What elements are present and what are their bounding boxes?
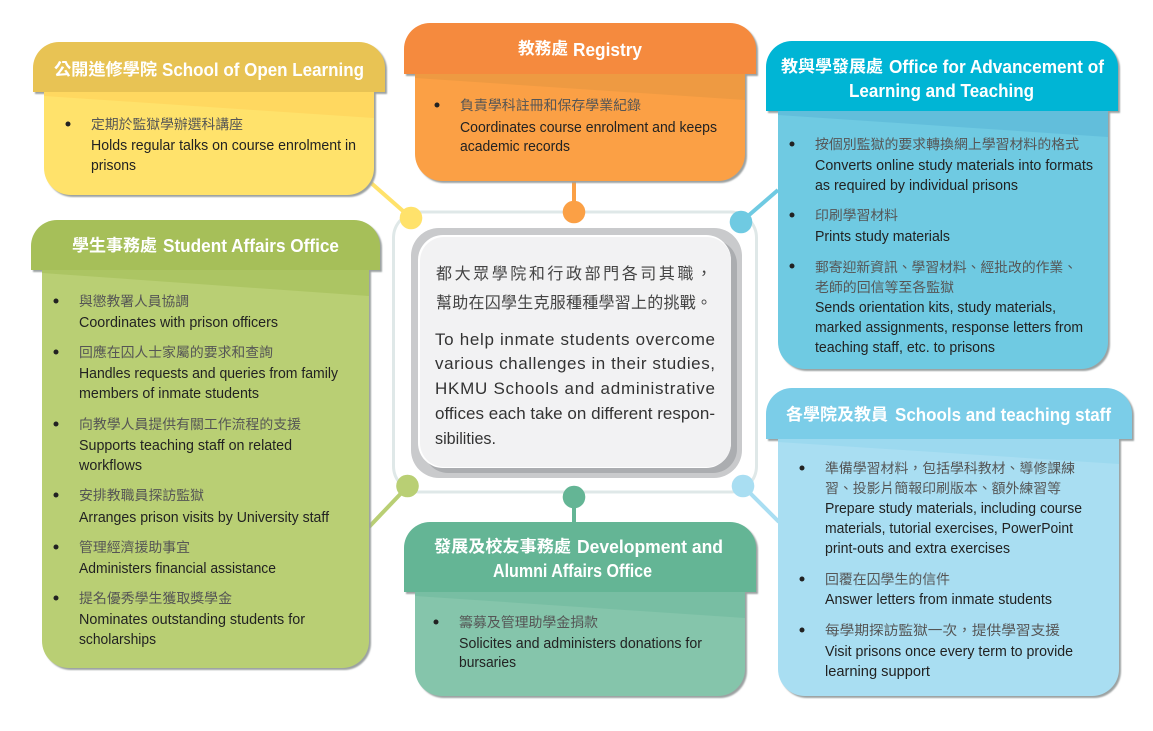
list item: sends kits: 郵寄迎新資訊、學習材料、經批改的作業、 <box>815 259 1077 275</box>
list item: sends kits: marked assignments, response letters from <box>815 320 1083 336</box>
heading: 發展及校友事務處 <box>434 536 572 556</box>
list item: coordinates: 與懲教署人員協調 <box>79 294 189 309</box>
heading: Office for Advancement of <box>889 57 1105 77</box>
list item: visit prisons: learning support <box>825 664 930 680</box>
central English text: HKMU Schools and administrative <box>435 379 715 398</box>
list item: Holds regular talks on course enrolment in <box>91 138 356 154</box>
list item <box>434 614 702 671</box>
list item: converts materials <box>790 137 1093 194</box>
list item: answer letters: Answer letters from inmate students <box>825 592 1052 608</box>
list item: prisons <box>91 158 136 174</box>
central English text <box>435 330 715 448</box>
list item: visit prisons: Visit prisons once every term to provide <box>825 644 1073 660</box>
list item: coordinates: Coordinates with prison officers <box>79 315 278 331</box>
list item: prints materials <box>790 208 950 245</box>
list item: nominates: Nominates outstanding students for <box>79 612 305 628</box>
heading: School of Open Learning <box>162 60 364 80</box>
panel: Registry <box>404 23 758 183</box>
heading <box>786 404 1112 425</box>
panel background: green <box>31 220 382 670</box>
list item: handles requests: members of inmate students <box>79 386 259 402</box>
heading: Schools and teaching staff <box>895 405 1112 425</box>
list item: prints materials: Prints study materials <box>815 229 950 245</box>
panel background: cyan <box>766 41 1120 371</box>
list item <box>66 117 356 174</box>
list item: nominates: scholarships <box>79 632 156 648</box>
heading <box>54 59 364 80</box>
central English text: sibilities. <box>435 429 496 448</box>
list item: prints materials: 印刷學習材料 <box>815 208 899 223</box>
central Chinese text: 都大眾學院和行政部門各司其職， <box>436 265 712 283</box>
list item: visit prisons: 每學期探訪監獄一次，提供學習支援 <box>825 623 1061 638</box>
heading <box>434 536 723 581</box>
list item: bursaries <box>459 655 516 671</box>
list item: Coordinates course enrolment and keeps <box>460 120 717 136</box>
heading <box>781 57 1105 101</box>
heading: 教務處 <box>518 39 569 58</box>
list item: arranges visits: 安排教職員探訪監獄 <box>79 488 205 503</box>
list item: 定期於監獄學辦選科講座 <box>91 117 243 132</box>
heading: Registry <box>573 40 642 60</box>
panel background: teal <box>404 522 758 698</box>
list item: sends kits <box>790 259 1083 356</box>
list item: sends kits: Sends orientation kits, study materials, <box>815 300 1056 316</box>
list item: converts materials: Converts online study materials into formats <box>815 158 1093 174</box>
panel: Development and Alumni Affairs Office <box>404 522 758 698</box>
list item: nominates: 提名優秀學生獲取獎學金 <box>79 591 233 606</box>
list item: prepare materials: print-outs and extra exercises <box>825 541 1010 557</box>
heading: 學生事務處 <box>72 236 158 255</box>
list item: coordinates <box>54 294 278 331</box>
list item <box>434 98 717 155</box>
list item: financial assistance: 管理經濟援助事宜 <box>79 539 190 555</box>
list item: 負責學科註冊和保存學業紀錄 <box>460 98 641 113</box>
list item: handles requests: Handles requests and queries from family <box>79 366 339 382</box>
heading: Alumni Affairs Office <box>493 561 652 581</box>
heading: 公開進修學院 <box>54 59 158 79</box>
central English text: various challenges in their studies, <box>435 354 715 373</box>
list item: converts materials: 按個別監獄的要求轉換網上學習材料的格式 <box>815 137 1080 152</box>
panel: Student Affairs Office <box>31 220 382 670</box>
panel background: yellow <box>33 42 387 197</box>
list item: supports staff <box>54 417 302 474</box>
list item: sends kits: teaching staff, etc. to prisons <box>815 340 995 356</box>
list item: supports staff: Supports teaching staff on related <box>79 438 292 454</box>
list item: prepare materials: Prepare study materials, including course <box>825 501 1082 517</box>
list item: prepare materials: 習、投影片簡報印刷版本、額外練習等 <box>825 480 1061 496</box>
panel: School of Open Learning <box>33 42 387 197</box>
list item: prepare materials <box>800 461 1082 557</box>
list item: academic records <box>460 139 570 155</box>
central English text: To help inmate students overcome <box>435 330 715 349</box>
central English text: offices each take on different respon- <box>435 404 715 423</box>
list item: 籌募及管理助學金捐款 <box>459 614 599 630</box>
list item: Solicites and administers donations for <box>459 636 702 652</box>
list item: supports staff: workflows <box>78 458 142 474</box>
list item: prepare materials: 準備學習材料，包括學科教材、導修課練 <box>825 461 1075 476</box>
panel: Schools and teaching staff <box>766 388 1134 698</box>
central Chinese text: 幫助在囚學生克服種種學習上的挑戰。 <box>436 294 712 312</box>
list item: answer letters <box>800 572 1052 608</box>
list item: prepare materials: materials, tutorial exercises, PowerPoint <box>825 521 1073 537</box>
heading <box>72 236 339 256</box>
heading: 教與學發展處 <box>781 57 884 76</box>
list item: converts materials: as required by individual prisons <box>815 178 1018 194</box>
heading: Student Affairs Office <box>163 236 339 256</box>
list item: nominates <box>54 591 305 648</box>
heading: Development and <box>577 537 723 557</box>
list item: arranges visits <box>54 488 330 526</box>
panel: Office for Advancement of Learning and Teaching <box>766 41 1120 371</box>
panel: central message <box>411 228 742 478</box>
heading: 各學院及教員 <box>786 404 889 424</box>
heading <box>518 39 642 60</box>
list item: supports staff: 向教學人員提供有關工作流程的支援 <box>79 417 302 432</box>
central Chinese text <box>436 265 712 312</box>
list item: visit prisons <box>800 623 1073 680</box>
list item: handles requests <box>54 344 339 402</box>
list item: sends kits: 老師的回信等至各監獄 <box>815 279 955 295</box>
list item: handles requests: 回應在囚人士家屬的要求和查詢 <box>79 344 273 360</box>
connector network <box>369 181 779 527</box>
heading: Learning and Teaching <box>849 81 1034 101</box>
panel background: orange <box>404 23 758 183</box>
list item: financial assistance: Administers financial assistance <box>79 561 276 577</box>
list item: arranges visits: Arranges prison visits by University staff <box>79 510 330 526</box>
list item: answer letters: 回覆在囚學生的信件 <box>825 572 950 587</box>
list item: financial assistance <box>54 539 276 577</box>
panel background: light blue <box>766 388 1134 698</box>
